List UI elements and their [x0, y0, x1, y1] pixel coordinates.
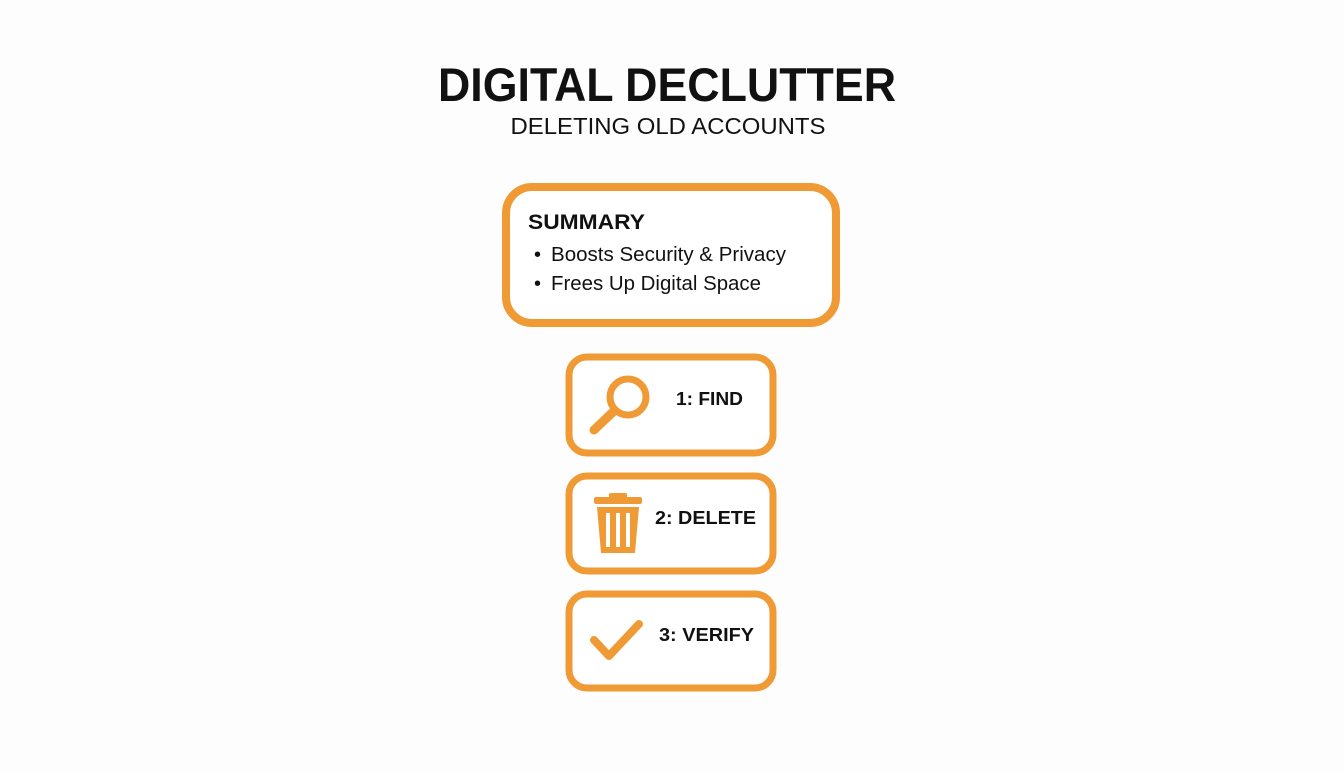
subtitle: DELETING OLD ACCOUNTS	[510, 113, 826, 139]
panel: step 3 verify: 3: VERIFY	[659, 625, 754, 645]
panel: step 2 delete	[569, 476, 773, 571]
panel: step 3 verify	[569, 594, 773, 688]
panel: summary: •	[534, 273, 541, 295]
panel: summary: Frees Up Digital Space	[551, 273, 761, 295]
panel: summary	[506, 187, 836, 323]
panel: summary: SUMMARY	[528, 211, 645, 234]
icon: checkmark	[594, 624, 639, 656]
icon: magnifier	[594, 379, 646, 430]
panel: summary: •	[534, 244, 541, 266]
icon: trash can	[594, 493, 642, 553]
panel: step 1 find	[569, 357, 773, 453]
title: DIGITAL DECLUTTER	[438, 58, 896, 111]
panel: summary: Boosts Security & Privacy	[551, 244, 786, 266]
panel: step 2 delete: 2: DELETE	[655, 508, 756, 528]
panel: step 1 find: 1: FIND	[676, 389, 743, 409]
